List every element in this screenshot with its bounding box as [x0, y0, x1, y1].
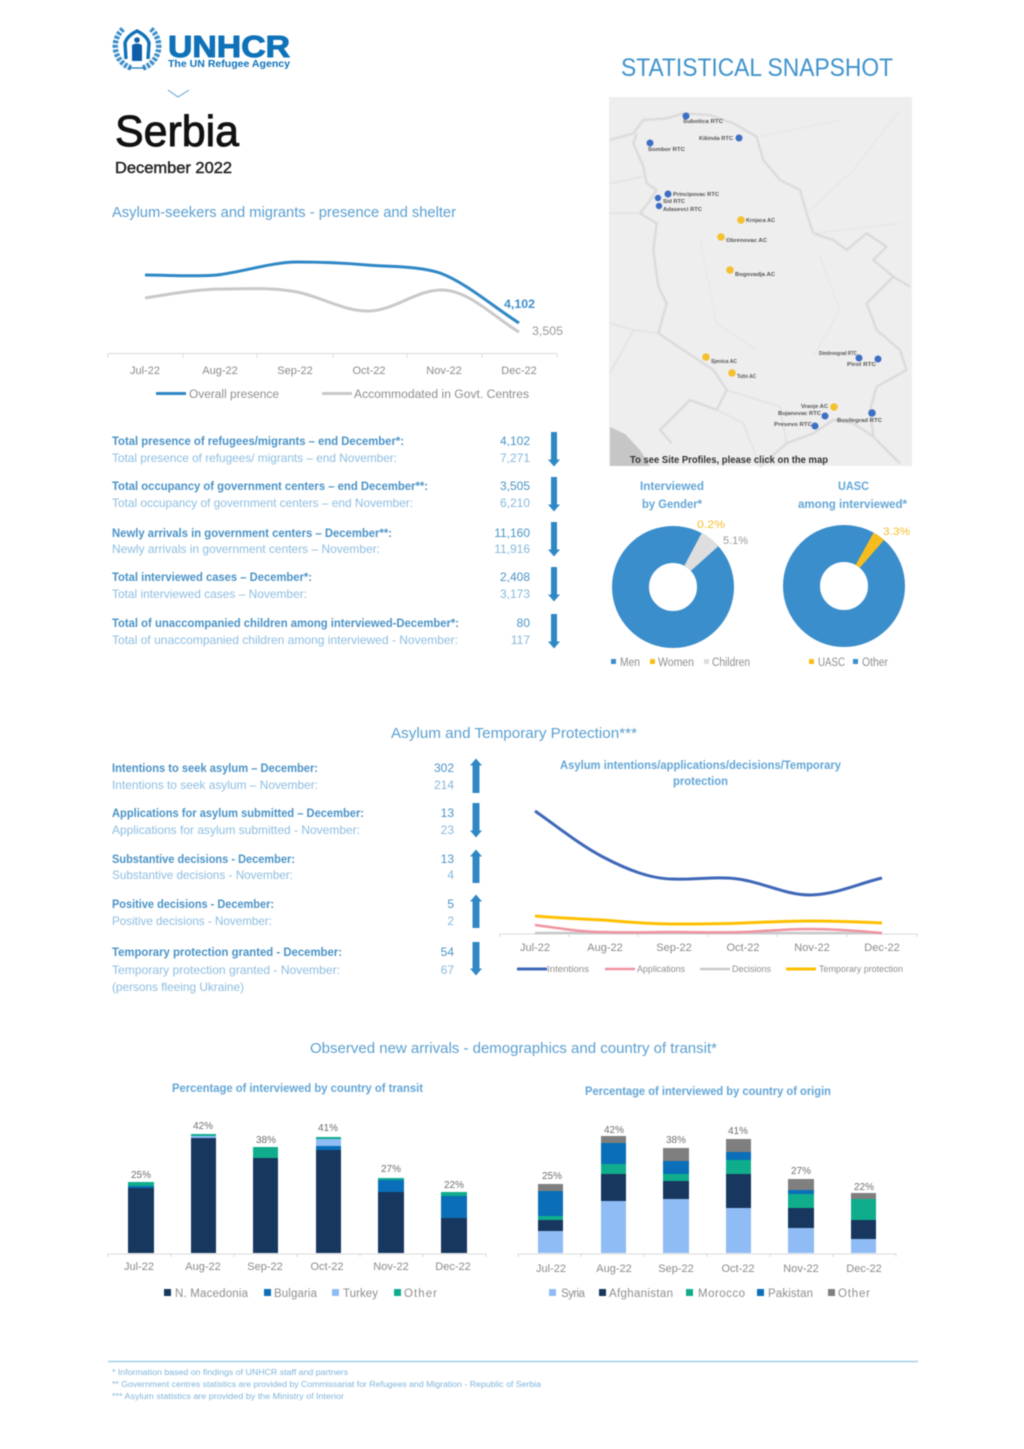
row: unaccompanied children [112, 614, 560, 648]
value: 4,102: 4,102 [504, 299, 535, 311]
icon: UNHCR emblem [115, 29, 159, 68]
legend: Intentions [547, 964, 589, 975]
x axis labels: Sep-22 [247, 1261, 283, 1273]
bar totals: 42% [604, 1125, 624, 1136]
donut title: among interviewed* [798, 499, 908, 511]
row: substantive decisions: Substantive decisions - November: [112, 868, 293, 882]
bars: Bulgaria [128, 1146, 467, 1218]
heading: asylum and temporary protection: Asylum and Temporary Protection*** [391, 725, 637, 742]
x axis labels: Nov-22 [794, 942, 830, 954]
x axis labels: Aug-22 [185, 1261, 221, 1273]
x axis labels: Aug-22 [587, 942, 623, 954]
row: applications [112, 803, 482, 838]
x axis labels: Oct-22 [310, 1261, 344, 1273]
row: intentions: Intentions to seek asylum – November: [112, 778, 318, 792]
row: interviewed cases [112, 567, 560, 602]
value: children: 5.1% [723, 535, 748, 547]
line chart: presence and shelter [108, 262, 563, 401]
legend: Temporary protection [819, 964, 903, 975]
line chart: asylum intentions, applications, decisions, temporary protection [500, 760, 917, 975]
bar totals [131, 1121, 464, 1191]
row: positive decisions: 2 [447, 914, 454, 928]
bar totals: 27% [381, 1164, 401, 1175]
row: substantive decisions [112, 850, 482, 883]
value: 3,505: 3,505 [532, 326, 563, 338]
date: December 2022 [115, 160, 232, 177]
row: unaccompanied children: Total of unaccompanied children among interviewed - November: [112, 633, 458, 647]
bar totals: 22% [444, 1180, 464, 1191]
row: applications: Applications for asylum submitted - November: [112, 823, 360, 837]
legend: Accommodated in Govt. Centres [354, 389, 529, 401]
x axis labels: Oct-22 [352, 365, 386, 377]
x axis labels: Nov-22 [373, 1261, 409, 1273]
footnotes: *** Asylum statistics are provided by the Ministry of Interior [112, 1392, 344, 1401]
row: positive decisions: 5 [447, 897, 454, 911]
legend: Afghanistan [609, 1288, 673, 1300]
row: substantive decisions: 13 [441, 852, 454, 866]
x axis labels: Dec-22 [435, 1261, 471, 1273]
chart title: Percentage of interviewed by country of origin [585, 1086, 831, 1098]
panel: asylum figures [112, 758, 482, 994]
row: new arrivals [112, 522, 560, 556]
bar totals: 25% [542, 1171, 562, 1182]
legend: Pakistan [768, 1288, 813, 1300]
map site labels: Sombor RTC [648, 147, 685, 153]
map site labels: Pirot RTC [847, 362, 876, 368]
row: total presence: Total presence of refugees/migrants – end December*: [112, 434, 404, 448]
donut legend [809, 657, 888, 669]
donut title: by Gender* [642, 499, 703, 511]
map site labels: Obrenovac AC [726, 238, 767, 244]
row: interviewed cases: Total interviewed cases – December*: [112, 570, 312, 584]
map site labels: Sid RTC [663, 199, 685, 205]
bars: Other [538, 1136, 876, 1199]
x axis labels [130, 365, 537, 377]
row: intentions: Intentions to seek asylum – December: [112, 761, 318, 775]
row: temporary protection: Temporary protection granted - November: [112, 963, 340, 977]
row: new arrivals: 11,160 [494, 526, 530, 540]
panel: key figures [112, 432, 560, 648]
legend: Other [838, 1288, 870, 1300]
row: total presence [112, 432, 560, 466]
donut legend: Other [862, 657, 888, 669]
x axis labels: Jul-22 [536, 1263, 566, 1275]
wedge: children [684, 533, 718, 571]
x axis labels: Sep-22 [658, 1263, 694, 1275]
map sites: reception and transit centres [646, 112, 882, 430]
x axis labels [520, 942, 900, 954]
donut legend: Women [658, 657, 694, 669]
map site labels: Bujanovac RTC [778, 411, 821, 417]
chart title: Percentage of interviewed by country of transit [172, 1083, 423, 1095]
map site labels [648, 119, 882, 428]
row: interviewed cases: 2,408 [500, 570, 530, 584]
map site labels: Kikinda RTC [699, 136, 733, 142]
row: interviewed cases: 3,173 [500, 587, 530, 601]
x axis labels: Jul-22 [130, 365, 160, 377]
bar totals: 41% [728, 1126, 748, 1137]
bars: Turkey [191, 1136, 341, 1146]
row: total presence: 7,271 [500, 451, 530, 465]
bar totals: 27% [791, 1166, 811, 1177]
row: new arrivals: Newly arrivals in government centers – December**: [112, 526, 392, 540]
x axis labels: Dec-22 [864, 942, 900, 954]
donut legend: UASC [818, 657, 845, 669]
bar totals: 22% [854, 1182, 874, 1193]
row: unaccompanied children: Total of unaccompanied children among interviewed-December*: [112, 616, 459, 630]
bar totals: 41% [318, 1123, 338, 1134]
bars: Other [128, 1134, 467, 1196]
line: applications [535, 925, 882, 933]
x axis labels: Oct-22 [726, 942, 760, 954]
legend: Other [404, 1288, 437, 1300]
legend: Syria [561, 1288, 586, 1300]
map site labels: Vranje AC [801, 404, 828, 410]
legend: Decisions [732, 964, 771, 975]
donut title: Interviewed [640, 481, 704, 493]
legend: N. Macedonia [175, 1288, 249, 1300]
legend [549, 1288, 870, 1300]
title: Serbia [115, 107, 240, 156]
map site labels: Dimitrovgrad RTC [819, 351, 857, 357]
logo wordmark: UNHCR [168, 29, 290, 64]
legend: Morocco [698, 1288, 745, 1300]
row: applications: Applications for asylum submitted – December: [112, 806, 364, 820]
line: temporary protection [535, 916, 882, 924]
footnotes [108, 1362, 918, 1401]
x axis labels: Dec-22 [501, 365, 537, 377]
bars: Afghanistan [538, 1174, 876, 1239]
row: total presence: 4,102 [500, 434, 530, 448]
line: overall presence [145, 262, 519, 323]
row: positive decisions: Positive decisions - November: [112, 914, 272, 928]
row: total occupancy: 6,210 [500, 496, 530, 510]
map sea corner [610, 427, 650, 466]
row: substantive decisions: Substantive decisions - December: [112, 852, 295, 866]
chart title [560, 760, 842, 788]
donut chart: UASC among interviewed [798, 481, 910, 669]
footnotes: * Information based on findings of UNHCR staff and partners [112, 1368, 348, 1377]
donut title [640, 481, 704, 511]
bar chart: country of transit [108, 1083, 486, 1300]
value: UASC: 3.3% [883, 526, 910, 538]
x axis labels [536, 1263, 882, 1275]
row: unaccompanied children: 80 [517, 616, 530, 630]
donut chart: interviewed by gender [611, 481, 750, 669]
bar totals: 38% [256, 1135, 276, 1146]
legend [156, 389, 529, 401]
map site labels: Tutin AC [737, 374, 756, 380]
row: temporary protection: (persons fleeing Ukraine) [112, 980, 244, 994]
value: women: 0.2% [697, 519, 725, 531]
chart title: protection [673, 776, 728, 788]
legend: Turkey [343, 1288, 378, 1300]
line: accommodated [145, 289, 519, 332]
map site labels: Sjenica AC [711, 359, 737, 365]
x axis labels: Sep-22 [656, 942, 692, 954]
row: temporary protection: 54 [441, 945, 454, 959]
logo tagline: The UN Refugee Agency [168, 59, 290, 70]
donut title: UASC [838, 481, 869, 493]
row: temporary protection: 67 [441, 963, 454, 977]
x axis labels: Aug-22 [596, 1263, 632, 1275]
row: substantive decisions: 4 [447, 868, 454, 882]
map site labels: Bosilegrad RTC [837, 418, 882, 424]
logo: UNHCR [115, 29, 290, 70]
row: positive decisions [112, 894, 482, 928]
row: temporary protection [112, 942, 482, 994]
x axis labels: Dec-22 [846, 1263, 882, 1275]
map caption: To see Site Profiles, please click on the map [630, 455, 828, 466]
donut legend [611, 657, 750, 669]
heading: presence and shelter: Asylum-seekers and migrants - presence and shelter [112, 204, 456, 221]
bars: Morocco [538, 1160, 876, 1220]
row: intentions: 302 [434, 761, 454, 775]
map sites: asylum centres [702, 216, 838, 411]
x axis labels: Nov-22 [426, 365, 462, 377]
x axis labels [124, 1261, 471, 1273]
line: intentions [535, 811, 882, 895]
row: positive decisions: Positive decisions - December: [112, 897, 274, 911]
row: total occupancy: Total occupancy of government centers – end November: [112, 496, 413, 510]
row: temporary protection: Temporary protection granted - December: [112, 945, 342, 959]
row: applications: 23 [441, 823, 454, 837]
bars: Syria [538, 1199, 876, 1253]
wedge: UASC [856, 533, 884, 568]
bars: Pakistan [538, 1143, 814, 1216]
bar totals: 38% [666, 1135, 686, 1146]
panel: map [609, 97, 912, 467]
bar chart: country of origin [518, 1086, 896, 1300]
donut legend: Men [620, 657, 640, 669]
map site labels: Adasevci RTC [663, 207, 702, 213]
bar totals: 25% [131, 1170, 151, 1181]
row: total occupancy: Total occupancy of government centers – end December**: [112, 479, 428, 493]
x axis labels: Jul-22 [124, 1261, 154, 1273]
chart title: Asylum intentions/applications/decisions/Temporary [560, 760, 842, 772]
row: interviewed cases: Total interviewed cases – November: [112, 587, 307, 601]
x axis labels: Sep-22 [277, 365, 313, 377]
row: total occupancy [112, 477, 560, 512]
row: intentions [112, 758, 482, 793]
map borders [610, 110, 910, 467]
legend [517, 964, 903, 975]
row: new arrivals: Newly arrivals in government centers – November: [112, 542, 380, 556]
legend [164, 1288, 437, 1300]
bars: N. Macedonia [128, 1138, 467, 1253]
heading: statistical snapshot: STATISTICAL SNAPSHOT [621, 54, 893, 82]
legend: Overall presence [189, 389, 279, 401]
x axis labels: Jul-22 [520, 942, 550, 954]
row: total presence: Total presence of refugees/ migrants – end November: [112, 451, 397, 465]
legend: Bulgaria [274, 1288, 318, 1300]
line: decisions [535, 932, 882, 934]
donut legend: Children [712, 657, 750, 669]
row: intentions: 214 [434, 778, 454, 792]
legend: Applications [637, 964, 685, 975]
donut title [798, 481, 908, 511]
map site labels: Presevo RTC [774, 422, 812, 428]
x axis labels: Oct-22 [721, 1263, 755, 1275]
map site labels: Krnjaca AC [746, 218, 775, 224]
footnotes: ** Government centres statistics are provided by Commissariat for Refugees and Migration - Republic of Serbia [112, 1380, 542, 1389]
row: new arrivals: 11,916 [494, 542, 530, 556]
icon: chevron [168, 90, 189, 97]
row: applications: 13 [441, 806, 454, 820]
x axis labels: Aug-22 [202, 365, 238, 377]
heading: observed new arrivals: Observed new arrivals - demographics and country of transit* [310, 1040, 717, 1057]
x axis labels: Nov-22 [783, 1263, 819, 1275]
row: unaccompanied children: 117 [511, 633, 530, 647]
map site labels: Bogovadja AC [735, 272, 775, 278]
map site labels: Principovac RTC [673, 192, 719, 198]
bar totals [542, 1125, 874, 1193]
row: total occupancy: 3,505 [500, 479, 530, 493]
bar totals: 42% [193, 1121, 213, 1132]
map site labels: Subotica RTC [683, 119, 723, 125]
